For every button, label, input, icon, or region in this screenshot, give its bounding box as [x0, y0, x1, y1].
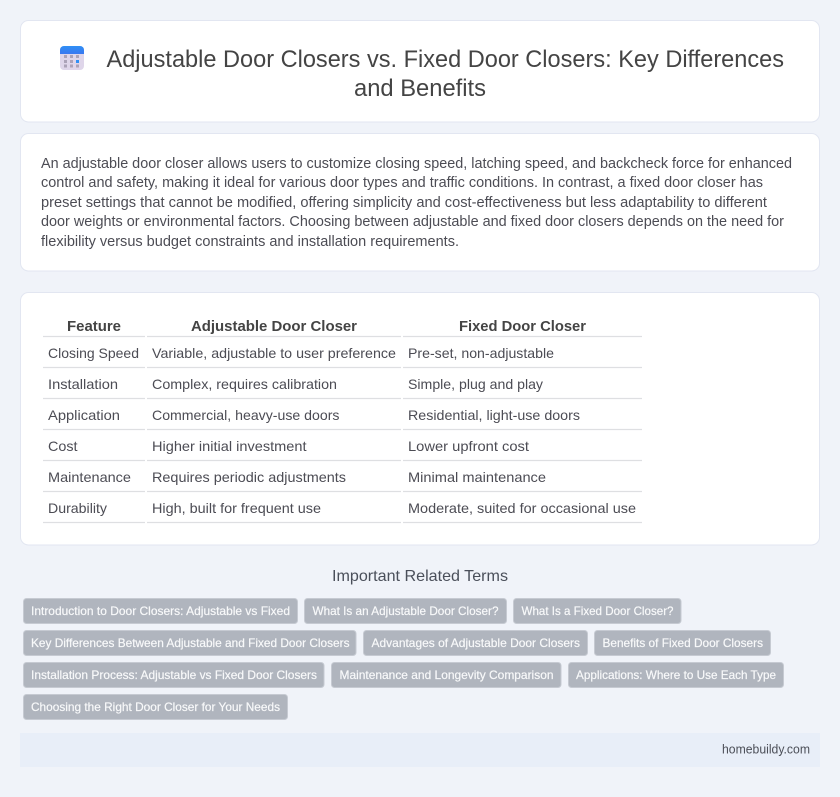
table header row: Adjustable Door Closer — [191, 319, 357, 335]
tag: installation process: Installation Process: Adjustable vs Fixed Door Closers — [31, 668, 317, 682]
tag: key differences — [24, 630, 356, 656]
tag: applications — [568, 662, 784, 688]
table header row: Feature — [67, 319, 121, 335]
row: application: Commercial, heavy-use doors — [152, 407, 340, 423]
tag: introduction: Introduction to Door Closers: Adjustable vs Fixed — [31, 604, 290, 618]
table header row — [43, 319, 642, 336]
row: installation — [43, 376, 642, 398]
footer: homebuildy.com — [722, 742, 810, 756]
row: durability — [43, 500, 642, 522]
title: and Benefits — [354, 75, 486, 102]
description text: An adjustable door closer allows users to customize closing speed, latching speed, and backcheck force for enhanced — [41, 156, 792, 172]
tag: installation process — [24, 662, 324, 688]
footer — [20, 733, 820, 767]
row: maintenance: Minimal maintenance — [408, 469, 546, 485]
row: closing speed: Pre-set, non-adjustable — [408, 345, 554, 361]
tag: fixed definition: What Is a Fixed Door Closer? — [522, 604, 674, 618]
tag: advantages: Advantages of Adjustable Door Closers — [372, 636, 580, 650]
description text — [41, 156, 792, 250]
row: installation: Simple, plug and play — [408, 376, 543, 392]
tag: choosing: Choosing the Right Door Closer for Your Needs — [31, 700, 280, 714]
tag: choosing — [24, 694, 288, 720]
related term tags — [24, 598, 784, 720]
row: closing speed: Variable, adjustable to user preference — [152, 345, 396, 361]
row: maintenance: Maintenance — [48, 469, 131, 485]
panel: description — [20, 134, 820, 271]
row: cost: Higher initial investment — [152, 438, 307, 454]
tag: benefits — [594, 630, 770, 656]
row: application — [43, 407, 642, 430]
description text: preset settings that cannot be modified, offering simplicity and cost-effectiveness but less adaptability to different — [41, 195, 767, 211]
row: durability: Moderate, suited for occasional use — [408, 500, 636, 516]
row: closing speed — [43, 345, 642, 368]
tag: introduction — [24, 598, 298, 624]
description text: door weights or environmental factors. Choosing between adjustable and fixed door closers depends on the need for — [41, 214, 784, 230]
heading: important related terms: Important Related Terms — [332, 568, 508, 585]
row: closing speed: Closing Speed — [48, 345, 139, 361]
row: cost: Lower upfront cost — [408, 438, 529, 454]
row: installation: Installation — [48, 376, 118, 392]
row: maintenance: Requires periodic adjustments — [152, 469, 346, 485]
row: application: Residential, light-use doors — [408, 407, 580, 423]
title — [106, 46, 784, 102]
panel: comparison table — [20, 292, 820, 545]
title: Adjustable Door Closers vs. Fixed Door Closers: Key Differences — [106, 46, 784, 73]
panel: header — [20, 20, 820, 122]
description text: flexibility versus budget constraints and installation requirements. — [41, 234, 459, 250]
table header row: Fixed Door Closer — [459, 319, 586, 335]
tag: adjustable definition — [304, 598, 506, 624]
tag: advantages — [364, 630, 588, 656]
tag: maintenance comparison: Maintenance and Longevity Comparison — [340, 668, 554, 682]
icon: calendar — [60, 46, 84, 70]
row: installation: Complex, requires calibration — [152, 376, 337, 392]
tag: benefits: Benefits of Fixed Door Closers — [602, 636, 763, 650]
row: durability: Durability — [48, 500, 107, 516]
row: cost — [43, 438, 642, 460]
row: durability: High, built for frequent use — [152, 500, 321, 516]
row: application: Application — [48, 407, 120, 423]
description text: control and safety, making it ideal for various door types and traffic conditions. In contrast, a fixed door closer has — [41, 175, 763, 191]
tag: applications: Applications: Where to Use Each Type — [576, 668, 776, 682]
tag: maintenance comparison — [332, 662, 561, 688]
row: cost: Cost — [48, 438, 78, 454]
tag: key differences: Key Differences Between Adjustable and Fixed Door Closers — [31, 636, 350, 650]
row: maintenance — [43, 469, 642, 492]
tag: fixed definition — [514, 598, 681, 624]
tag: adjustable definition: What Is an Adjustable Door Closer? — [312, 604, 499, 618]
